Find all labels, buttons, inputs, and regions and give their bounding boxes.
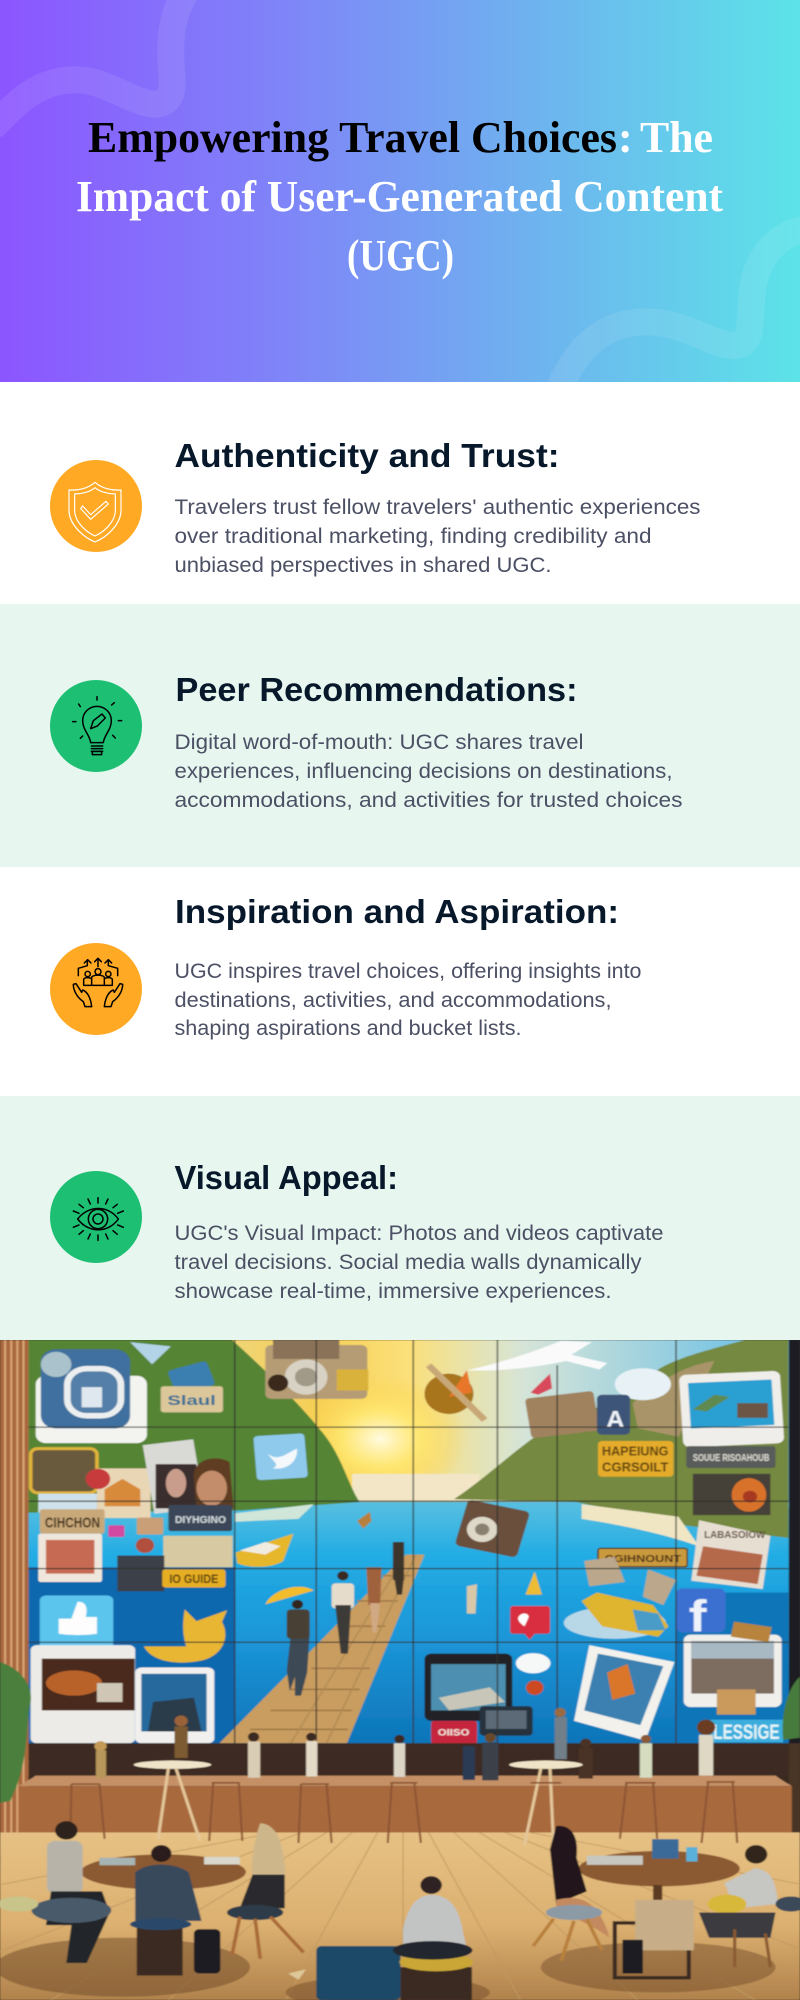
collage photos right: LABASOIOW bbox=[704, 1530, 766, 1541]
text block: shaping aspirations and bucket lists. bbox=[174, 1016, 522, 1040]
panel: inspiration and aspiration bbox=[0, 867, 800, 1096]
red heart tile and cloud bbox=[510, 1606, 551, 1695]
counter and floor bbox=[0, 1743, 800, 2000]
wood wall bbox=[0, 1340, 800, 1832]
title: Impact of User-Generated Content bbox=[76, 172, 723, 221]
text block: Digital word-of-mouth: UGC shares travel bbox=[174, 730, 584, 754]
text block: Travelers trust fellow travelers' authentic experiences bbox=[174, 495, 700, 519]
title: Empowering Travel Choices bbox=[88, 113, 617, 162]
heading: Visual Appeal: bbox=[174, 1159, 398, 1196]
text block: accommodations, and activities for trusted choices bbox=[174, 788, 682, 812]
twitter tile bbox=[253, 1433, 308, 1480]
camera top bbox=[265, 1340, 368, 1399]
text block: experiences, influencing decisions on destinations, bbox=[174, 759, 672, 783]
top left social icons bbox=[36, 1342, 223, 1443]
heading: Peer Recommendations: bbox=[176, 671, 578, 708]
polaroid photo bbox=[574, 1645, 674, 1741]
text block: travel decisions. Social media walls dynamically bbox=[174, 1250, 642, 1274]
heading: Inspiration and Aspiration: bbox=[175, 893, 619, 930]
boat and small sea items bbox=[236, 1512, 542, 1614]
collage photos right bbox=[684, 1520, 783, 1744]
text block bbox=[174, 959, 642, 1040]
text block: UGC inspires travel choices, offering insights into bbox=[174, 959, 642, 983]
panel: peer recommendations bbox=[0, 604, 800, 867]
pier and walkers bbox=[219, 1542, 424, 1743]
panel: visual appeal bbox=[0, 1096, 800, 1340]
icon: hands lifting a group bbox=[50, 943, 142, 1035]
tall tables and stools bbox=[70, 1760, 737, 1845]
seated group left bbox=[0, 1821, 304, 1976]
yellow bird bbox=[144, 1609, 227, 1663]
title: (UGC) bbox=[347, 231, 454, 280]
signs right: HAPEIUNG bbox=[602, 1444, 668, 1458]
panel: authenticity and trust bbox=[0, 382, 800, 604]
text block: UGC's Visual Impact: Photos and videos captivate bbox=[174, 1221, 664, 1245]
title bbox=[76, 113, 723, 280]
signs and car bbox=[564, 1548, 687, 1639]
plants bbox=[0, 1662, 800, 1803]
facebook tile: f bbox=[689, 1593, 707, 1641]
signs right: CGRSOILT bbox=[602, 1460, 669, 1474]
center person and stools bbox=[288, 1876, 473, 2000]
title: : bbox=[618, 113, 633, 162]
old camera bbox=[454, 1499, 530, 1558]
text block: unbiased perspectives in shared UGC. bbox=[174, 553, 552, 577]
left collage: IO GUIDE bbox=[169, 1572, 219, 1586]
panel: header bbox=[0, 0, 800, 382]
screen grid bbox=[29, 1340, 788, 1743]
icon: light bulb with pencil bbox=[50, 680, 142, 772]
tablet and red tag: OIISO bbox=[438, 1728, 469, 1738]
map sign and A icon bbox=[525, 1391, 630, 1438]
figures on counter bbox=[94, 1708, 715, 1780]
text block: destinations, activities, and accommodations, bbox=[174, 988, 612, 1012]
text block bbox=[174, 730, 682, 812]
heading: Authenticity and Trust: bbox=[174, 437, 560, 474]
left collage: DIYHGINO bbox=[175, 1515, 226, 1526]
icon: shield with check bbox=[50, 460, 142, 552]
left collage bbox=[31, 1439, 234, 1591]
text block bbox=[174, 1221, 664, 1303]
video wall background bbox=[29, 1340, 789, 1744]
top left social icons: Slaul bbox=[167, 1394, 216, 1409]
thumb tile bbox=[40, 1595, 113, 1651]
tablet and red tag bbox=[424, 1654, 533, 1744]
map sign and A icon: A bbox=[606, 1405, 624, 1433]
seated group right bbox=[533, 1826, 800, 1978]
signs right bbox=[598, 1441, 776, 1515]
text block bbox=[174, 495, 700, 577]
white frame photos bbox=[31, 1645, 214, 1743]
text block: over traditional marketing, finding credibility and bbox=[174, 524, 652, 548]
left collage: CIHCHON bbox=[45, 1516, 100, 1531]
text block: showcase real-time, immersive experiences. bbox=[174, 1279, 612, 1303]
plane and compass bbox=[424, 1341, 607, 1420]
icon: eye with rays bbox=[50, 1171, 142, 1263]
signs and car: CGIHNOUNT bbox=[605, 1554, 681, 1565]
panel: illustration of social media wall bbox=[0, 1340, 800, 2000]
title: The bbox=[640, 113, 713, 162]
top right monitor bbox=[679, 1371, 784, 1447]
facebook tile bbox=[676, 1588, 726, 1641]
